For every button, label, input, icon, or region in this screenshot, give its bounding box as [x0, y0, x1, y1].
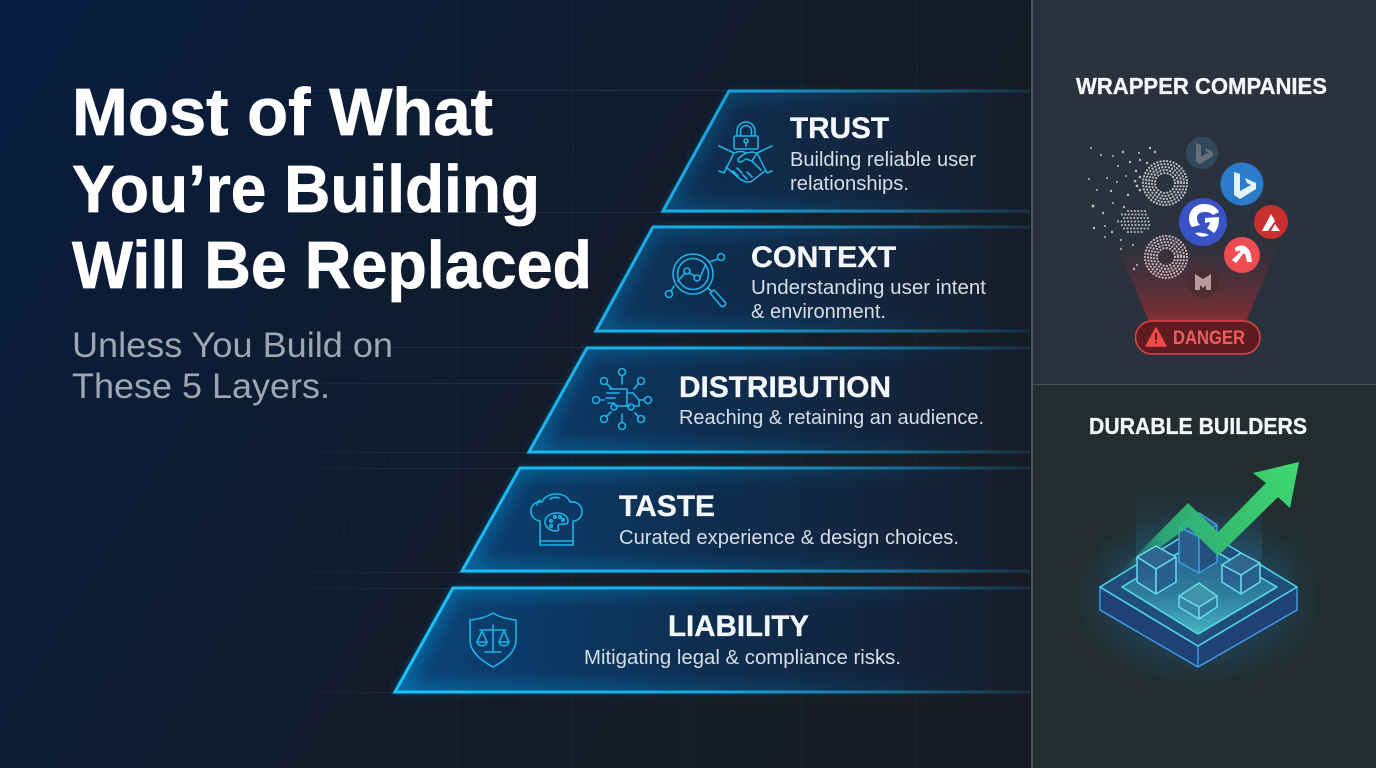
icon: red triangle logo	[1254, 205, 1288, 239]
dissolving logos	[1088, 147, 1187, 278]
text: distribution: Reaching & retaining an audience.	[679, 407, 984, 429]
front cube	[1179, 583, 1217, 619]
title: Will Be Replaced	[72, 228, 592, 303]
text: distribution: DISTRIBUTION	[679, 371, 891, 404]
title: Most of What	[72, 75, 493, 150]
heading: wrapper companies: WRAPPER COMPANIES	[1076, 73, 1327, 99]
icon: faded bing logo	[1186, 137, 1218, 169]
icon: bing logo	[1220, 162, 1264, 206]
icon: chef hat with palette	[531, 494, 582, 545]
panel: distribution tier	[529, 348, 1030, 452]
text: trust	[790, 112, 976, 195]
arrow: growth	[1120, 462, 1299, 572]
text: context: Understanding user intent	[751, 277, 986, 299]
panel: durable builders	[1033, 384, 1376, 768]
text: taste: TASTE	[619, 490, 715, 523]
text: context	[751, 241, 986, 323]
text: distribution	[679, 371, 984, 429]
left cube	[1137, 546, 1176, 594]
subtitle: Unless You Build on	[72, 326, 393, 365]
icon: lock and handshake	[719, 122, 772, 182]
text: danger: DANGER	[1173, 328, 1245, 349]
subtitle: These 5 Layers.	[72, 367, 330, 406]
icon: blue ring logo	[1179, 198, 1227, 246]
title: You’re Building	[72, 152, 540, 227]
icon: coral logo	[1224, 237, 1260, 273]
badge: danger	[1136, 321, 1260, 354]
tall center block	[1179, 513, 1217, 573]
text: taste: Curated experience & design choices.	[619, 527, 959, 549]
background	[0, 0, 1032, 768]
text: liability: Mitigating legal & compliance risks.	[584, 647, 901, 669]
right cube	[1222, 553, 1260, 594]
panel: context tier	[596, 227, 1030, 331]
heading: durable builders: DURABLE BUILDERS	[1089, 413, 1307, 439]
text: context: & environment.	[751, 301, 886, 323]
subtitle	[72, 326, 393, 406]
icon: warning triangle	[1146, 328, 1166, 346]
text: taste	[619, 490, 959, 549]
panel: taste tier	[462, 468, 1030, 571]
icon: shield with scales	[470, 613, 516, 667]
text: liability: LIABILITY	[668, 610, 809, 643]
panel: wrapper companies	[1031, 0, 1376, 768]
text: liability	[584, 610, 901, 669]
isometric platform	[1100, 527, 1297, 667]
icon: dim logo	[1187, 266, 1219, 298]
text: trust: TRUST	[790, 112, 889, 145]
panel: liability tier	[395, 588, 1030, 692]
glow under platform	[1073, 510, 1323, 686]
light rays	[1092, 483, 1306, 585]
danger beam	[1114, 237, 1280, 322]
text: trust: relationships.	[790, 173, 909, 195]
text: trust: Building reliable user	[790, 149, 976, 171]
panel: trust tier	[663, 91, 1030, 211]
title	[72, 75, 592, 303]
icon: magnifier with chart	[666, 254, 726, 307]
icon: delivery truck network	[592, 368, 652, 430]
text: context: CONTEXT	[751, 241, 896, 274]
